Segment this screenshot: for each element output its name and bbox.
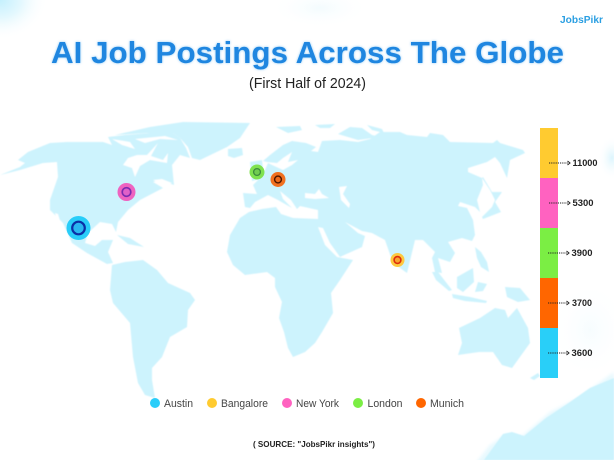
bar segment: Austin 3600	[540, 328, 558, 378]
legend item: Austin	[150, 398, 193, 410]
legend item: New York: New York	[296, 398, 339, 410]
bar label: 3600	[548, 348, 592, 358]
map: Inland seas	[305, 186, 350, 208]
bar label: 11000: 11000	[572, 158, 598, 168]
legend	[150, 398, 464, 410]
bar label: 3900	[548, 248, 592, 258]
marker: Austin	[66, 216, 90, 240]
legend item: London: London	[368, 398, 402, 410]
bar segment: Munich 3700	[540, 278, 558, 328]
bar segment: New York 5300	[540, 178, 558, 228]
map: Greenland	[115, 122, 250, 160]
map: UK and Ireland	[250, 160, 264, 181]
marker: London	[250, 164, 264, 180]
legend item: Bangalore: Bangalore	[221, 398, 268, 410]
bar segment: London 3900	[540, 228, 558, 278]
bar label: 3900: 3900	[572, 248, 592, 258]
map: Arctic islands	[276, 124, 384, 140]
map: Southeast Asia islands	[432, 247, 530, 303]
title: AI Job Postings Across The Globe	[51, 35, 564, 70]
legend item: London	[353, 398, 402, 410]
logo: JobsPikr	[560, 15, 603, 26]
bar segment: Bangalore 11000	[540, 128, 558, 178]
map: Iceland	[228, 148, 243, 158]
stacked bar	[540, 128, 558, 378]
marker: New York	[118, 183, 136, 201]
map: Japan band	[482, 177, 502, 219]
map: Cuba	[117, 235, 144, 247]
subtitle: (First Half of 2024)	[249, 76, 366, 92]
world map	[0, 122, 540, 398]
title: AI Job Postings Across The Globe	[51, 35, 564, 70]
bar label: 3700	[548, 298, 592, 308]
source note: ( SOURCE: "JobsPikr insights")	[253, 439, 375, 449]
map: Tasmania	[530, 373, 540, 380]
map: Eurasia and Africa	[227, 132, 525, 357]
marker: Bangalore	[390, 253, 404, 267]
legend item: Munich	[416, 398, 464, 410]
bar label: 11000	[549, 158, 598, 168]
map: North America	[0, 133, 190, 264]
marker: Munich	[270, 172, 286, 187]
legend item: Austin: Austin	[164, 398, 193, 410]
legend item: Munich: Munich	[430, 398, 464, 410]
bar label: 5300: 5300	[572, 198, 594, 208]
bar label: 5300	[549, 198, 594, 208]
bar label: 3600: 3600	[572, 348, 592, 358]
map: Hudson Bay and arctic channels	[55, 136, 178, 234]
bar label: 3700: 3700	[572, 298, 592, 308]
map: South America	[110, 260, 195, 398]
map: Australia	[458, 308, 530, 368]
